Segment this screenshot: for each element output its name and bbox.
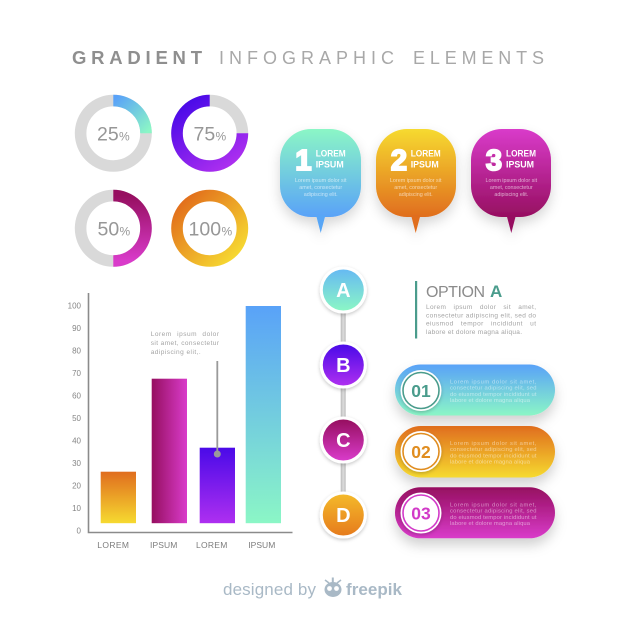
donut chart: 100%: 100 [188, 218, 221, 240]
y axis labels: 10 [72, 504, 82, 513]
icon: freepik mascot [324, 578, 342, 597]
pill 02: consectetur adipiscing elit, sed [450, 447, 536, 453]
bar: ipsum 1 [152, 379, 187, 523]
pill 02: labore et dolore magna aliqua [450, 460, 531, 466]
x axis labels [97, 540, 275, 550]
pill 02: Lorem ipsum dolor sit amet, [450, 441, 537, 447]
donut chart: 75% [177, 101, 242, 166]
step C [320, 416, 367, 464]
speech bubble 3: 3 [486, 145, 502, 177]
speech bubble 1: 1 [295, 145, 312, 177]
step A [320, 266, 367, 314]
y axis labels: 20 [72, 482, 82, 490]
donut chart: 100% [177, 196, 242, 261]
bar: lorem 2 [200, 448, 235, 523]
pill 01 [395, 364, 555, 416]
y axis labels: 90 [72, 324, 82, 333]
title [72, 47, 544, 68]
speech bubble 2: adipiscing elit. [399, 192, 433, 198]
pill 03: Lorem ipsum dolor sit amet, [450, 502, 537, 508]
pill 01: Lorem ipsum dolor sit amet, [450, 380, 537, 386]
pill 03 [395, 487, 555, 538]
y axis labels: 50 [72, 414, 82, 423]
pill 03: 03 [411, 504, 431, 524]
step A: A [336, 280, 351, 302]
pill 03: labore et dolore magna aliqua [450, 521, 531, 527]
speech bubble 2: Lorem ipsum dolor sit [390, 178, 442, 184]
donut chart: 50% [81, 196, 146, 261]
y axis labels: 70 [72, 369, 82, 378]
option A text block: labore et dolore magna aliqua. [426, 329, 522, 336]
speech bubble 3: Lorem ipsum dolor sit [486, 178, 538, 184]
chart note [151, 331, 220, 356]
x axis labels: IPSUM [150, 540, 177, 550]
speech bubble 2: 2 [391, 145, 407, 177]
speech bubble 2: amet, consectetur [394, 185, 437, 191]
footer credit [223, 578, 403, 599]
y axis labels: 40 [72, 436, 82, 446]
speech bubble 2 [376, 129, 456, 233]
donut chart: 25%: % [119, 130, 130, 144]
donut chart: 25%: 25 [97, 124, 119, 146]
x axis labels: IPSUM [248, 540, 275, 550]
y axis labels: 100 [68, 302, 82, 310]
title: INFOGRAPHIC [219, 48, 394, 68]
pill 01: do eiusmod tempor incididunt ut [450, 392, 537, 398]
callout pointer [214, 361, 221, 458]
step B [320, 342, 367, 388]
donut chart: 50%: % [120, 224, 130, 238]
speech bubble 1: amet, consectetur [299, 185, 342, 191]
step B: B [336, 355, 351, 377]
x axis labels: LOREM [196, 540, 227, 550]
donut chart: 100%: % [222, 224, 232, 238]
speech bubble 3: adipiscing elit. [494, 192, 528, 198]
speech bubble 2: IPSUM [411, 159, 439, 169]
bar: lorem 1 [101, 472, 136, 523]
option A text block: consectetur adipiscing elit, sed do [426, 312, 536, 319]
bar chart [68, 293, 292, 550]
step C: C [336, 430, 351, 452]
title: GRADIENT [72, 47, 203, 68]
speech bubble 1: IPSUM [316, 159, 344, 169]
connectors [341, 305, 346, 505]
donut chart: 75%: % [216, 130, 226, 144]
option A text block: eiusmod tempor incididunt ut [426, 321, 536, 328]
y axis labels [68, 302, 82, 536]
bar: ipsum 2 [246, 306, 281, 523]
footer credit: freepik [346, 580, 403, 599]
pill 01: 01 [411, 381, 431, 401]
x axis labels: LOREM [97, 540, 129, 550]
speech bubble 3: amet, consectetur [490, 185, 533, 191]
title: ELEMENTS [413, 48, 544, 68]
pill 01: consectetur adipiscing elit, sed [450, 386, 536, 392]
pill 02 [395, 426, 555, 478]
step D [320, 492, 367, 538]
y axis labels: 0 [77, 526, 82, 536]
speech bubble 3: IPSUM [506, 159, 534, 169]
chart note: adipiscing elit,. [151, 349, 201, 356]
donut chart: 75%: 75 [194, 124, 215, 146]
chart note: sit amet, consectetur [151, 340, 220, 347]
footer credit: designed by [223, 580, 316, 599]
y axis labels: 60 [72, 392, 82, 400]
pill 03: consectetur adipiscing elit, sed [450, 508, 536, 514]
pill 02: do eiusmod tempor incididunt ut [450, 454, 537, 460]
pill 02: 02 [411, 442, 431, 462]
speech bubble 2: LOREM [411, 148, 441, 158]
option A text block: OPTION [426, 284, 485, 301]
donut chart: 50%: 50 [98, 218, 119, 240]
option A text block: A [490, 282, 502, 301]
y axis labels: 80 [72, 346, 82, 356]
speech bubble 3 [471, 129, 551, 233]
speech bubble 1 [280, 129, 361, 233]
pill 01: labore et dolore magna aliqua [450, 398, 531, 404]
step D: D [336, 505, 351, 527]
option A text block [415, 281, 536, 338]
speech bubble 1: LOREM [316, 148, 346, 158]
pill 03: do eiusmod tempor incididunt ut [450, 515, 537, 521]
y axis labels: 30 [72, 459, 82, 468]
donut chart: 25% [81, 101, 146, 166]
speech bubble 1: adipiscing elit. [304, 192, 338, 198]
option A text block: Lorem ipsum dolor sit amet, [426, 304, 536, 311]
chart note: Lorem ipsum dolor [151, 331, 220, 338]
speech bubble 1: Lorem ipsum dolor sit [295, 178, 347, 184]
speech bubble 3: LOREM [506, 148, 536, 158]
